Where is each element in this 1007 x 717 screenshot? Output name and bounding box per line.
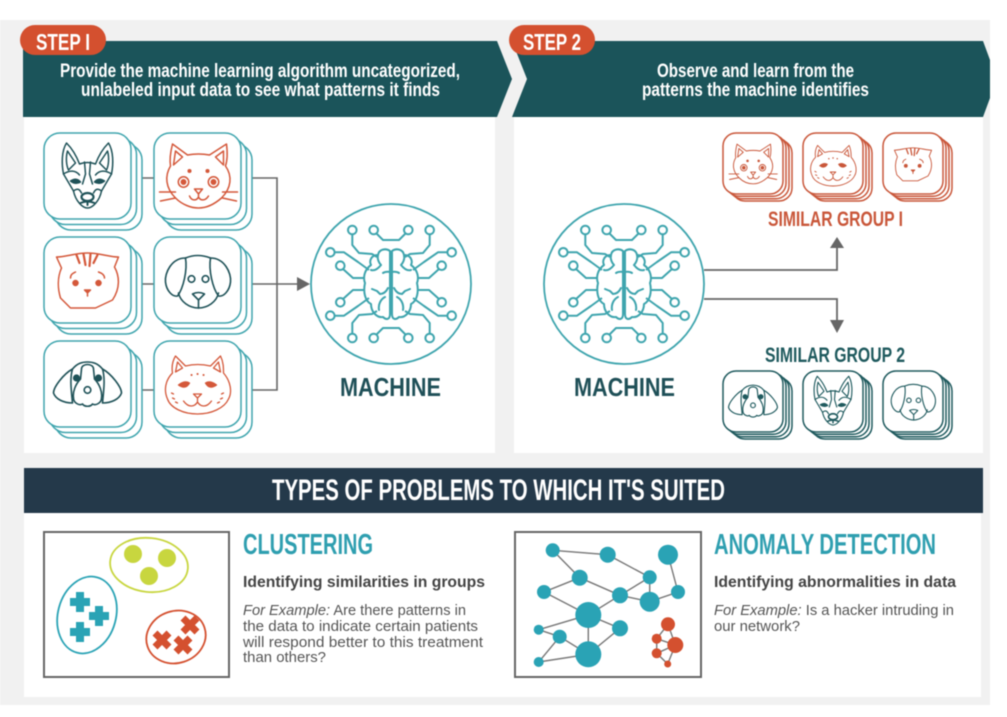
step 2 header banner bbox=[512, 41, 990, 117]
group 1 cat cards bbox=[723, 133, 952, 201]
panel: step 1 bbox=[20, 25, 512, 453]
machine label: MACHINE bbox=[574, 372, 675, 402]
card: husky bbox=[803, 371, 872, 439]
text block: clustering: CLUSTERING bbox=[243, 529, 373, 561]
card: cat with whiskers bbox=[154, 133, 252, 230]
text block: clustering: the data to indicate certain patients bbox=[243, 618, 478, 635]
text block: clustering: will respond better to this treatment bbox=[242, 634, 484, 651]
arrow to group 2 bbox=[704, 299, 844, 333]
heading text: TYPES OF PROBLEMS TO WHICH IT'S SUITED bbox=[272, 474, 725, 507]
step 2 description: Observe and learn from the bbox=[657, 61, 854, 82]
icon: machine brain bbox=[311, 204, 471, 364]
card: round-faced cat bbox=[803, 133, 872, 201]
step 1 description: unlabeled input data to see what patterns it finds bbox=[81, 80, 440, 101]
group 2 dog cards bbox=[723, 371, 952, 439]
step 2 description bbox=[642, 61, 869, 101]
card: husky dog bbox=[44, 133, 142, 230]
step 1 badge bbox=[20, 25, 106, 55]
panel: step 2 bbox=[509, 25, 990, 453]
step 1 description: Provide the machine learning algorithm uncategorized, bbox=[60, 61, 460, 82]
panel: types of problems bbox=[24, 468, 983, 697]
text block: anomaly detection: Identifying abnormalities in data bbox=[714, 574, 956, 591]
card: striped cat bbox=[883, 133, 952, 201]
card: floppy-eared dog bbox=[883, 371, 952, 439]
arrow to group 1 bbox=[704, 237, 844, 270]
text block: anomaly detection: our network? bbox=[714, 618, 800, 635]
step 2 body bbox=[514, 117, 983, 453]
text block: anomaly detection: For Example: Is a hacker intruding in bbox=[714, 602, 954, 619]
text block: clustering: than others? bbox=[243, 649, 326, 666]
card: beagle bbox=[723, 371, 792, 439]
step 1 badge: STEP I bbox=[36, 29, 90, 55]
heading band bbox=[24, 468, 983, 513]
step 1 body bbox=[24, 117, 495, 453]
text block: clustering: Identifying similarities in groups bbox=[243, 574, 485, 591]
chart: clustering diagram bbox=[44, 532, 229, 677]
lower panel body bbox=[24, 513, 981, 697]
icon: machine brain bbox=[544, 204, 704, 364]
card: floppy-eared dog bbox=[154, 237, 252, 334]
text block: anomaly detection bbox=[714, 529, 956, 635]
group 1 label: SIMILAR GROUP I bbox=[768, 208, 903, 231]
step 2 badge bbox=[509, 25, 595, 55]
card: round-faced cat bbox=[154, 341, 252, 438]
step 2 badge: STEP 2 bbox=[523, 29, 581, 55]
chart: anomaly network diagram bbox=[515, 532, 701, 677]
card: striped cat bbox=[44, 237, 142, 334]
step 1 description bbox=[60, 61, 460, 101]
card: beagle bbox=[44, 341, 142, 438]
step 2 description: patterns the machine identifies bbox=[642, 80, 869, 101]
group 2 label: SIMILAR GROUP 2 bbox=[765, 344, 905, 367]
machine label: MACHINE bbox=[340, 372, 441, 402]
connector lines and arrow into machine bbox=[142, 178, 310, 390]
text block: clustering bbox=[242, 529, 485, 666]
text block: clustering: For Example: Are there patterns in bbox=[243, 602, 466, 619]
step 1 header banner bbox=[23, 41, 512, 117]
card: cat bbox=[723, 133, 792, 201]
